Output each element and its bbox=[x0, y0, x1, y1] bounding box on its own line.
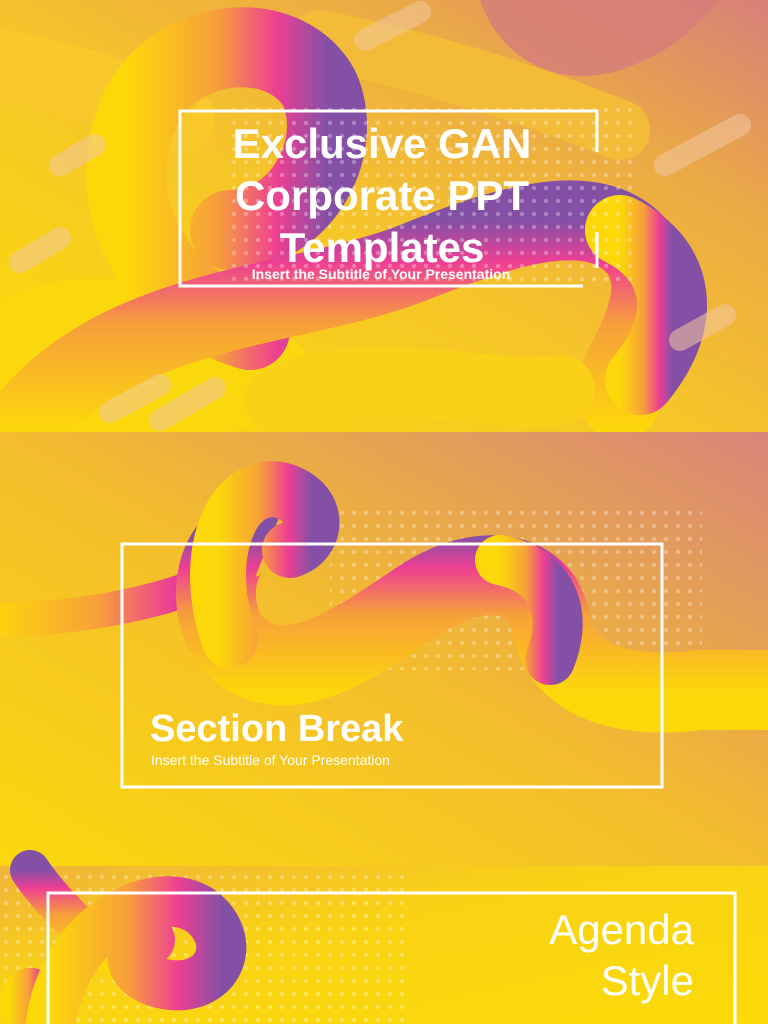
slide 2: section break bbox=[0, 432, 768, 866]
agenda frame bbox=[48, 893, 735, 1024]
title text: Exclusive GAN bbox=[233, 120, 531, 167]
tube: wave bbox=[20, 220, 651, 430]
agenda heading: Agenda bbox=[549, 906, 695, 953]
title frame bbox=[180, 111, 597, 286]
subtitle 1: Insert the Subtitle of Your Presentation bbox=[252, 266, 510, 282]
agenda heading: Style bbox=[601, 957, 694, 1004]
title text bbox=[233, 120, 531, 271]
tube: big loop bbox=[126, 47, 327, 330]
title text: Templates bbox=[280, 224, 484, 271]
slide 3: agenda bbox=[0, 866, 768, 1024]
title text: Corporate PPT bbox=[235, 172, 529, 219]
section subtitle: Insert the Subtitle of Your Presentation bbox=[151, 752, 390, 768]
agenda heading bbox=[549, 906, 695, 1004]
section heading: Section Break bbox=[150, 708, 404, 750]
slide 1: title bbox=[0, 0, 768, 432]
section frame bbox=[122, 544, 662, 787]
